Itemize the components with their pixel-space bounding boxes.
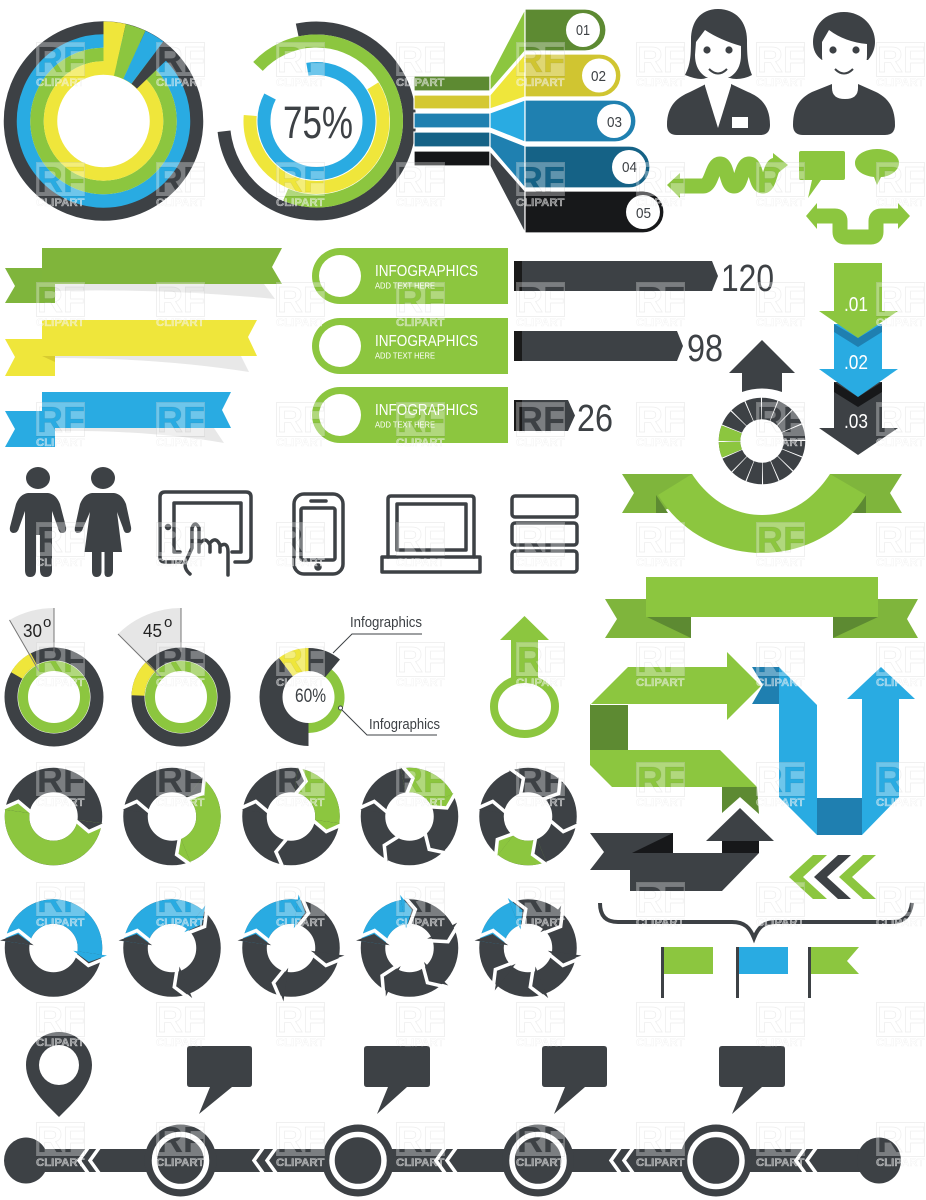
icon: map pin xyxy=(26,1032,92,1117)
watermark grid: CLIPART xyxy=(156,317,205,329)
chart: cycle ring 6 segments green xyxy=(476,764,580,869)
watermark grid: CLIPART xyxy=(276,1037,325,1049)
watermark grid: CLIPART xyxy=(636,1037,685,1049)
bar: 98 xyxy=(514,328,723,370)
icon: blue flag xyxy=(736,947,788,998)
watermark grid: CLIPART xyxy=(516,197,565,209)
chart: arrow ring 2 segments blue xyxy=(0,907,107,989)
chart: 60% donut with callouts xyxy=(256,614,440,750)
chart: 75% concentric arcs xyxy=(203,8,430,234)
watermark grid: CLIPART xyxy=(636,797,685,809)
watermark grid: CLIPART xyxy=(156,197,205,209)
timeline xyxy=(4,1124,901,1196)
chart: arrow ring 6 segments blue xyxy=(475,895,581,1001)
bar: 120: 120 xyxy=(721,258,774,300)
watermark grid: RFRFRFRFRFRFRFRF xyxy=(37,279,925,320)
icon: oval speech bubble xyxy=(855,149,899,185)
watermark grid: CLIPART xyxy=(36,1157,85,1169)
chart: striped spiral donut xyxy=(1,19,206,223)
icon: green ring with up arrow xyxy=(494,616,555,734)
panel: infographics label 2: INFOGRAPHICS xyxy=(375,333,478,350)
chart: 45 degree donut xyxy=(118,608,225,741)
watermark grid: CLIPART xyxy=(876,917,925,929)
watermark grid: CLIPART xyxy=(516,677,565,689)
watermark grid: CLIPART xyxy=(756,797,805,809)
panel: infographics label 3: INFOGRAPHICS xyxy=(375,402,478,419)
watermark grid: CLIPART xyxy=(876,1037,925,1049)
watermark grid: CLIPART xyxy=(876,437,925,449)
watermark grid: RFRFRFRFRFRFRFRF xyxy=(37,759,925,800)
watermark grid: CLIPART xyxy=(276,1157,325,1169)
chart: five numbered fan ribbons xyxy=(414,9,664,233)
watermark grid: CLIPART xyxy=(756,677,805,689)
watermark grid: CLIPART xyxy=(36,677,85,689)
arrows: stacked down arrows .01 .02 .03: .01 xyxy=(844,294,868,316)
watermark grid: CLIPART xyxy=(156,557,205,569)
callout bubble 3 xyxy=(542,1046,607,1114)
watermark grid: CLIPART xyxy=(276,317,325,329)
watermark grid: CLIPART xyxy=(36,317,85,329)
watermark grid: CLIPART xyxy=(276,917,325,929)
ribbon: yellow xyxy=(5,320,257,376)
watermark grid: CLIPART xyxy=(636,917,685,929)
watermark grid: RFRFRFRFRFRFRFRF xyxy=(37,39,925,80)
watermark grid: CLIPART xyxy=(876,317,925,329)
watermark grid: CLIPART xyxy=(396,797,445,809)
callout bubble 2 xyxy=(364,1046,430,1114)
callout bubble 4 xyxy=(719,1046,785,1114)
watermark grid: CLIPART xyxy=(876,677,925,689)
chart: five numbered fan ribbons: 05 xyxy=(636,205,651,222)
ribbon: green xyxy=(5,248,282,303)
panel: infographics label 1: ADD TEXT HERE xyxy=(375,280,435,290)
chart: 30 degree donut xyxy=(0,608,113,756)
watermark grid: CLIPART xyxy=(276,437,325,449)
bar: 98: 98 xyxy=(687,328,723,370)
bar: 26 xyxy=(514,398,613,440)
watermark grid: CLIPART xyxy=(516,317,565,329)
bar: 120 xyxy=(514,258,774,300)
watermark grid: CLIPART xyxy=(756,77,805,89)
watermark grid: CLIPART xyxy=(36,917,85,929)
watermark grid: CLIPART xyxy=(396,1037,445,1049)
watermark grid: CLIPART xyxy=(156,797,205,809)
watermark grid: CLIPART xyxy=(276,77,325,89)
panel: infographics label 3: ADD TEXT HERE xyxy=(375,420,435,430)
chart: five numbered fan ribbons: 02 xyxy=(591,68,606,85)
arrow: blue folded U arrow xyxy=(752,667,915,835)
icon: green flag xyxy=(661,947,713,998)
watermark grid: CLIPART xyxy=(756,557,805,569)
watermark grid: CLIPART xyxy=(636,557,685,569)
watermark grid: CLIPART xyxy=(36,437,85,449)
panel: infographics label 1: INFOGRAPHICS xyxy=(375,263,478,280)
label: 75%: 75% xyxy=(283,97,353,148)
watermark grid: CLIPART xyxy=(636,77,685,89)
watermark grid: CLIPART xyxy=(36,197,85,209)
watermark grid: CLIPART xyxy=(276,197,325,209)
chart: five numbered fan ribbons: 03 xyxy=(607,114,622,131)
watermark grid: CLIPART xyxy=(516,437,565,449)
watermark grid: CLIPART xyxy=(876,197,925,209)
arrows: stacked down arrows .01 .02 .03: .03 xyxy=(844,411,868,433)
watermark grid: RFRFRFRFRFRFRFRF xyxy=(37,519,925,560)
watermark grid: CLIPART xyxy=(756,197,805,209)
icon: rectangular speech bubble xyxy=(799,151,845,198)
watermark grid: CLIPART xyxy=(276,557,325,569)
chart: 45 degree donut: 45 xyxy=(143,621,162,641)
watermark grid: RFRFRFRFRFRFRFRF xyxy=(37,639,925,680)
watermark grid: CLIPART xyxy=(516,797,565,809)
watermark grid: RFRFRFRFRFRFRFRF xyxy=(37,159,925,200)
watermark grid: CLIPART xyxy=(396,917,445,929)
panel: infographics label 3 xyxy=(312,387,508,443)
chart: cycle ring 4 segments green xyxy=(239,764,343,869)
chart: 30 degree donut: 30 xyxy=(23,621,42,641)
watermark grid: CLIPART xyxy=(756,317,805,329)
arrow: dark folded arrow xyxy=(590,808,774,891)
watermark grid: RFRFRFRFRFRFRFRF xyxy=(37,1119,925,1160)
icon: database stack xyxy=(512,496,577,572)
icon: tablet with touching hand xyxy=(160,492,251,575)
arrow: dark up arrow xyxy=(729,340,795,392)
watermark grid: CLIPART xyxy=(396,677,445,689)
chart: arrow ring 4 segments blue xyxy=(238,895,344,1001)
watermark grid: CLIPART xyxy=(636,197,685,209)
icon: smartphone xyxy=(294,494,343,574)
watermark grid: CLIPART xyxy=(516,77,565,89)
watermark grid: CLIPART xyxy=(156,77,205,89)
icon: laptop xyxy=(382,496,480,572)
chart: 30 degree donut: o xyxy=(43,614,51,631)
chart: five numbered fan ribbons: 01 xyxy=(576,22,590,39)
watermark grid: RFRFRFRFRFRFRFRF xyxy=(37,879,925,920)
watermark grid: CLIPART xyxy=(36,77,85,89)
bracket: curly brace xyxy=(600,903,912,938)
watermark grid: CLIPART xyxy=(396,557,445,569)
arrow: green double-headed bent arrow xyxy=(806,203,910,237)
ribbon: blue xyxy=(5,392,231,447)
icon: woman pictogram xyxy=(75,467,131,577)
watermark grid: CLIPART xyxy=(876,1157,925,1169)
chart: cycle ring 3 segments green xyxy=(120,765,223,869)
watermark grid: CLIPART xyxy=(636,437,685,449)
watermark grid: CLIPART xyxy=(756,437,805,449)
ribbon: curved green banner xyxy=(622,474,902,553)
watermark grid: CLIPART xyxy=(276,677,325,689)
arrow: green folded S arrow xyxy=(590,652,761,814)
watermark grid: CLIPART xyxy=(876,797,925,809)
icon: businessman xyxy=(793,12,895,135)
chart: cycle ring 5 segments green xyxy=(357,763,461,864)
watermark grid: RFRFRFRFRFRFRFRF xyxy=(37,999,925,1040)
icon: triple chevrons xyxy=(789,855,876,899)
chart: cycle ring 2 segments green xyxy=(1,775,106,858)
chart: arrow ring 5 segments blue xyxy=(356,893,461,997)
chart: segmented progress ring xyxy=(720,399,804,483)
watermark grid: CLIPART xyxy=(396,197,445,209)
watermark grid: CLIPART xyxy=(396,1157,445,1169)
watermark grid: CLIPART xyxy=(756,917,805,929)
arrows: stacked down arrows .01 .02 .03 xyxy=(819,263,898,455)
callout bubble 1 xyxy=(187,1046,252,1114)
icon: businesswoman xyxy=(667,9,770,135)
watermark grid: CLIPART xyxy=(156,917,205,929)
watermark grid: CLIPART xyxy=(396,437,445,449)
chart: five numbered fan ribbons: 04 xyxy=(622,159,637,176)
chart: 60% donut with callouts: Infographics xyxy=(369,716,440,733)
chart: 45 degree donut: o xyxy=(164,614,172,631)
watermark grid: CLIPART xyxy=(516,1037,565,1049)
chart: 60% donut with callouts: Infographics xyxy=(350,614,422,631)
watermark grid: CLIPART xyxy=(756,1037,805,1049)
arrow: green squiggle xyxy=(667,153,788,198)
icon: green pennant flag xyxy=(808,947,859,998)
watermark grid: CLIPART xyxy=(156,1037,205,1049)
watermark grid: CLIPART xyxy=(156,1157,205,1169)
watermark grid: CLIPART xyxy=(876,557,925,569)
watermark grid: CLIPART xyxy=(636,1157,685,1169)
arrows: stacked down arrows .01 .02 .03: .02 xyxy=(844,352,868,374)
watermark grid: CLIPART xyxy=(36,557,85,569)
watermark grid: CLIPART xyxy=(516,557,565,569)
chart: 60% donut with callouts: 60% xyxy=(295,686,326,707)
watermark grid: RFRFRFRFRFRFRFRF xyxy=(37,399,925,440)
watermark grid: CLIPART xyxy=(156,437,205,449)
panel: infographics label 2 xyxy=(312,318,508,374)
watermark grid: CLIPART xyxy=(516,1157,565,1169)
watermark grid: CLIPART xyxy=(876,77,925,89)
watermark grid: CLIPART xyxy=(516,917,565,929)
panel: infographics label 1 xyxy=(312,248,508,304)
watermark grid: CLIPART xyxy=(156,677,205,689)
watermark grid: CLIPART xyxy=(276,797,325,809)
bar: 26: 26 xyxy=(577,398,613,440)
chart: arrow ring 3 segments blue xyxy=(119,905,214,1001)
watermark grid: CLIPART xyxy=(36,797,85,809)
icon: man pictogram xyxy=(10,467,66,577)
ribbon: flat green banner xyxy=(605,577,918,638)
watermark grid: CLIPART xyxy=(756,1157,805,1169)
watermark grid: CLIPART xyxy=(636,317,685,329)
watermark grid: CLIPART xyxy=(396,317,445,329)
panel: infographics label 2: ADD TEXT HERE xyxy=(375,350,435,360)
watermark grid: CLIPART xyxy=(396,77,445,89)
watermark grid: CLIPART xyxy=(36,1037,85,1049)
watermark grid: CLIPART xyxy=(636,677,685,689)
